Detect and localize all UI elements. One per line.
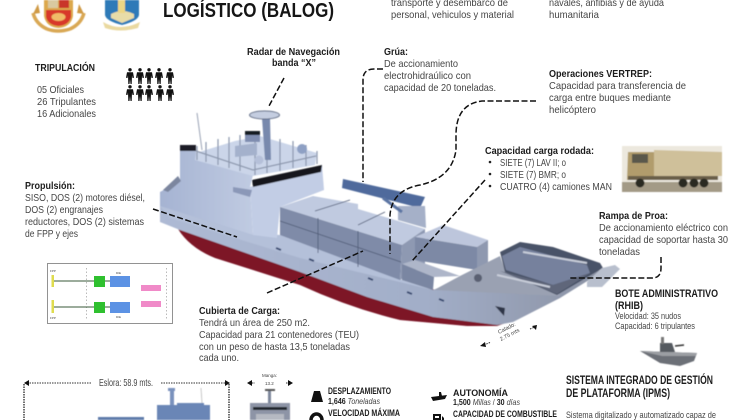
callout: crane: Grúa: [384, 46, 408, 58]
ship 3D view [160, 111, 620, 326]
beam dimension: Manga: [262, 373, 277, 378]
callout: propulsion: de FPP y ejes [25, 228, 78, 240]
callout: bow ramp: De accionamiento eléctrico con [599, 222, 728, 234]
length dimension [24, 377, 230, 420]
text block: crew [35, 61, 96, 120]
title: LOGÍSTICO (BALOG) [163, 0, 334, 22]
beam dimension: 13.2 [265, 381, 274, 386]
bow ramp [587, 265, 620, 287]
mast [262, 118, 271, 160]
callout: RHIB: BOTE ADMINISTRATIVO [615, 288, 718, 300]
upper deck [195, 136, 317, 176]
bow rails [497, 252, 587, 287]
text block: crew: 26 Tripulantes [37, 96, 96, 108]
spec: endurance: AUTONOMÍA [453, 388, 508, 398]
red lower hull [178, 229, 520, 326]
forward container [415, 225, 488, 247]
callout: cargo deck: Cubierta de Carga: [199, 305, 280, 317]
hull ports and mark [276, 248, 444, 301]
spec: displacement [328, 386, 391, 406]
callout: VERTREP: helicóptero [549, 104, 596, 116]
text block: IPMS [566, 374, 716, 420]
stern superstructure [160, 146, 253, 235]
rear containers [280, 196, 425, 245]
text block: transport mission: personal, vehiculos y material [391, 9, 514, 21]
callout: RHIB [615, 288, 718, 331]
callout: rolling cargo: CUATRO (4) camiones MAN [500, 181, 612, 193]
callout: bow ramp: Rampa de Proa: [599, 210, 668, 222]
callout: cargo deck [199, 305, 359, 364]
spec: max speed: VELOCIDAD MÁXIMA [328, 408, 400, 418]
callout: VERTREP: Operaciones VERTREP: [549, 68, 652, 80]
spec: endurance [453, 388, 521, 407]
text block: naval mission [549, 0, 664, 21]
image: RHIB boat [640, 337, 697, 366]
callout: draft measure: Calado: [497, 322, 517, 336]
text block: transport mission [391, 0, 514, 21]
callout: draft measure: 2.75 mts [499, 328, 521, 343]
ship front profile [250, 389, 290, 420]
callout: propulsion: Propulsión: [25, 180, 75, 192]
spec: endurance: 1,500 Millas / 30 días [453, 397, 521, 407]
callout: radar [247, 46, 340, 69]
callout: cargo deck: cada uno. [199, 352, 239, 364]
icon: fuel pump [433, 414, 444, 420]
callout: crane: capacidad de 20 toneladas. [384, 82, 496, 94]
callout: rolling cargo: SIETE (7) BMR; o [500, 169, 566, 181]
callout: bow ramp: toneladas [599, 246, 640, 258]
bow deck [434, 256, 560, 296]
photo: MAN truck [622, 146, 722, 192]
radomes [254, 156, 264, 164]
text block: crew: 05 Oficiales [37, 84, 84, 96]
callout: VERTREP: Capacidad para transferencia de [549, 80, 686, 92]
callout: crane [384, 46, 496, 94]
text block: naval mission: humanitaria [549, 9, 599, 21]
callout: RHIB: Velocidad: 35 nudos [615, 311, 681, 321]
length dimension: Eslora: 58.9 mts. [99, 377, 153, 389]
hull side [160, 192, 605, 325]
stern funnel [180, 145, 196, 151]
diagram: propulsion layout: DIE [116, 271, 121, 275]
diagram: propulsion layout: FPP [50, 269, 56, 273]
icon: displacement weight [311, 391, 323, 402]
bow well [500, 242, 603, 295]
callout: bow ramp: capacidad de soportar hasta 30 [599, 234, 728, 246]
icon: ship range [431, 392, 447, 401]
leader lines [153, 69, 661, 293]
emblem: logistics unit shield [103, 0, 140, 30]
text block: IPMS: DE PLATAFORMA (IPMS) [566, 388, 670, 400]
icon: crew figures [126, 68, 174, 101]
callout: cargo deck: Tendrá un área de 250 m2. [199, 317, 310, 329]
spec: fuel capacity: CAPACIDAD DE COMBUSTIBLE [453, 409, 557, 419]
callout: rolling cargo: SIETE (7) LAV II; o [500, 157, 566, 169]
radar antenna [250, 111, 280, 119]
text block: crew: TRIPULACIÓN [35, 61, 95, 74]
callout: crane: De accionamiento [384, 58, 458, 70]
callout: draft measure [480, 322, 537, 347]
callout: cargo deck: con un peso de hasta 13,5 toneladas [199, 341, 350, 353]
callout: VERTREP [549, 68, 686, 116]
callout: RHIB: Capacidad: 6 tripulantes [615, 321, 695, 331]
lower container [402, 260, 460, 277]
callout: VERTREP: carga entre buques mediante [549, 92, 671, 104]
callout: propulsion: DOS (2) engranajes [25, 204, 103, 216]
text block: crew: 16 Adicionales [37, 108, 96, 120]
callout: rolling cargo [485, 145, 612, 193]
icon: speed gauge [311, 414, 322, 420]
callout: propulsion: reductores, DOS (2) sistemas [25, 216, 144, 228]
spec: displacement: 1,646 Toneladas [328, 396, 381, 406]
diagram: propulsion layout: FPP [50, 316, 56, 320]
diagram: propulsion layout [48, 264, 172, 324]
emblem: naval coat of arms [33, 0, 84, 31]
mid funnel [245, 132, 260, 142]
callout: crane: electrohidraúlico con [384, 70, 471, 82]
box on deck [235, 143, 257, 157]
callout: bow ramp [599, 210, 728, 258]
crane arm [342, 179, 425, 208]
callout: radar: banda “X” [272, 57, 316, 69]
beam dimension [247, 373, 293, 386]
callout: propulsion: SISO, DOS (2) motores diésel, [25, 192, 145, 204]
callout: cargo deck: Capacidad para 21 contenedores (TEU) [199, 329, 359, 341]
callout: radar: Radar de Navegación [247, 46, 340, 58]
callout: propulsion [25, 180, 145, 240]
callout: RHIB: (RHIB) [615, 300, 643, 312]
bridge windows [252, 165, 322, 187]
diagram: propulsion layout: DIE [116, 315, 121, 319]
callout: rolling cargo: Capacidad carga rodada: [485, 145, 594, 157]
ship side profile [98, 388, 210, 420]
spec: displacement: DESPLAZAMIENTO [328, 386, 391, 396]
aerial [197, 113, 202, 150]
